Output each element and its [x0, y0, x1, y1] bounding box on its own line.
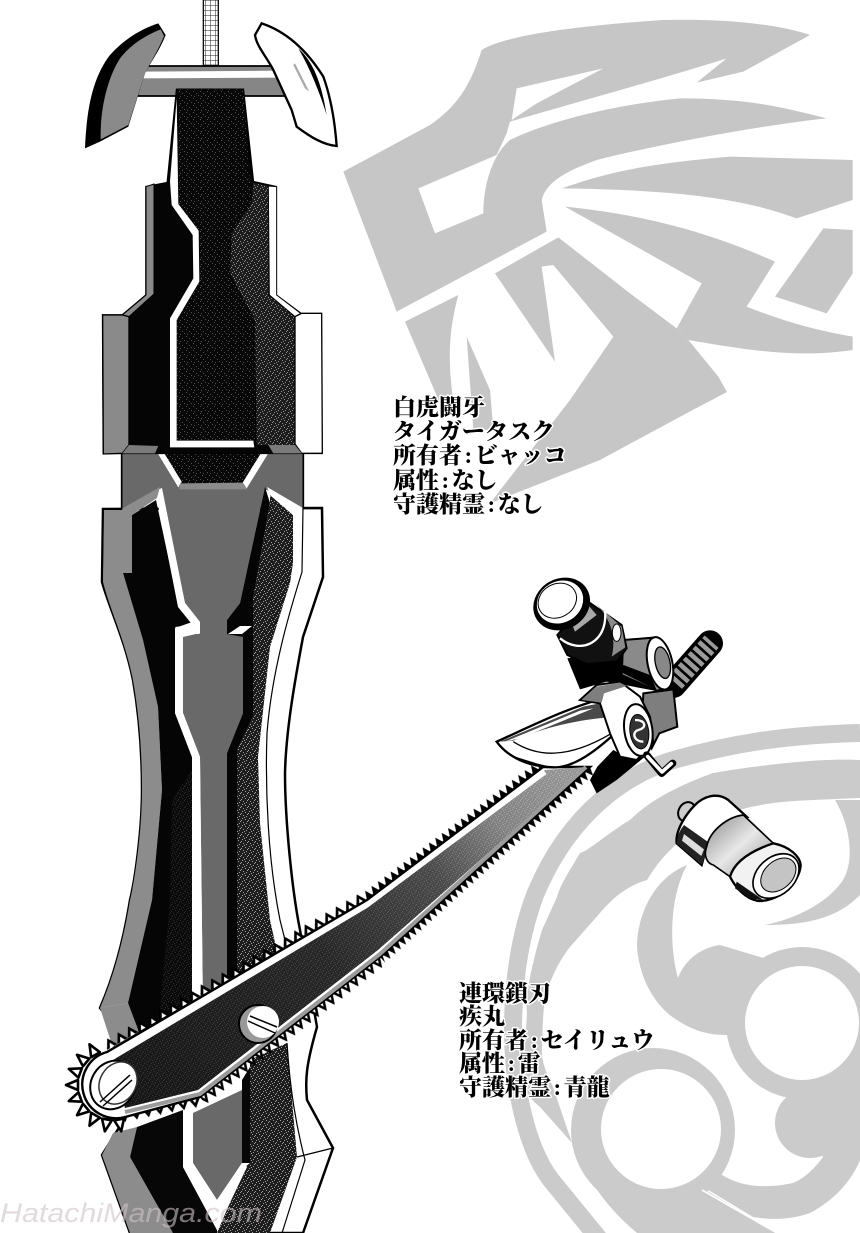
- outer ring of crest: [513, 733, 860, 1233]
- right horn: [255, 23, 337, 146]
- caption: chain blade: 属性:雷: [459, 1050, 541, 1076]
- left grey strips: [122, 184, 154, 317]
- small white notches: [175, 625, 252, 634]
- caption: chain blade: 疾丸: [459, 1004, 505, 1029]
- background emblem: triple comma crest: [513, 733, 860, 1233]
- middle screw: [239, 1005, 279, 1043]
- lower comma white centre: [601, 1069, 721, 1189]
- upper comma body: [637, 865, 770, 1035]
- capsule front: [730, 843, 801, 901]
- lower dark clamp: [590, 750, 645, 793]
- centre dark panel: [177, 89, 255, 442]
- sword: upper blade body: [103, 89, 322, 454]
- chainsaw blade bar: [66, 763, 593, 1132]
- capsule knob: [675, 799, 699, 824]
- centre grey panel: [157, 487, 265, 1010]
- thin inner line on white edge: [266, 508, 303, 1000]
- right stippled panel: [230, 183, 295, 445]
- tip saw teeth: [66, 1042, 126, 1132]
- inner crescent of crest: [523, 760, 860, 1143]
- left bevel arc: [123, 487, 160, 515]
- knob head: [524, 567, 600, 641]
- upper left white line: [157, 488, 200, 633]
- right comma white centre: [745, 966, 859, 1080]
- blade guard: [497, 698, 615, 767]
- upper silhouette: [103, 89, 322, 453]
- black housing: [567, 650, 660, 692]
- hanging chain: [203, 0, 218, 65]
- watermark: HatachiManga.com: [0, 1198, 262, 1228]
- knob stem: [557, 601, 627, 664]
- chainsaw mechanism: [497, 567, 808, 907]
- capsule back: [677, 796, 747, 865]
- caption: chain blade: 所有者:セイリュウ: [459, 1028, 654, 1053]
- crossbar: [135, 66, 285, 96]
- saw chain rim: [82, 767, 590, 1118]
- band lower extension: [122, 485, 303, 510]
- right white panel: [295, 313, 322, 453]
- bar texture: [113, 767, 586, 1108]
- separate capsule cartridge: [675, 796, 808, 907]
- band notch: [158, 448, 267, 487]
- caption: tiger tusk: 属性:なし: [393, 468, 498, 493]
- left horn: [85, 23, 166, 148]
- right comma ring: [726, 947, 860, 1099]
- sword: lower blade body: [100, 485, 333, 1233]
- centre white line: [175, 630, 203, 1010]
- caption: tiger tusk: 所有者:ビャッコ: [393, 443, 567, 468]
- right white arc: [267, 487, 303, 590]
- bar plate: [113, 767, 586, 1108]
- side cylinder: [620, 635, 678, 692]
- grey below left corner: [100, 1003, 142, 1048]
- centre white outline: [170, 98, 254, 447]
- tip screw: [81, 1052, 145, 1118]
- caption: chain blade: 守護精霊:青龍: [459, 1074, 610, 1100]
- bottom bevels: [122, 445, 302, 453]
- caption: tiger tusk: タイガータスク: [393, 419, 555, 444]
- right stippled panel: [237, 495, 293, 1010]
- capsule glass: [705, 815, 773, 877]
- right edge mass: [800, 1060, 860, 1160]
- white top stripe: [108, 772, 545, 1056]
- background emblem: tiger crest: [343, 20, 853, 503]
- stippled shading on left panel: [160, 770, 192, 1010]
- caption: tiger tusk: 守護精霊:なし: [393, 491, 544, 517]
- caption: tiger tusk: [393, 394, 567, 517]
- lower-left comma mass: [575, 1130, 777, 1233]
- band white bars: [156, 447, 269, 488]
- lower centre grey: [193, 1090, 242, 1200]
- right black stripes: [227, 487, 270, 1010]
- band trapezoid: [179, 483, 247, 489]
- lower comma ring: [571, 1048, 735, 1212]
- sword: central band: [122, 447, 303, 508]
- hub cap: [580, 682, 653, 760]
- left grey edge: [100, 510, 162, 1008]
- rear bracket: [642, 689, 677, 748]
- lower tip stipple: [217, 1043, 297, 1233]
- upper right crescent: [765, 800, 860, 925]
- left grey panel: [103, 315, 129, 454]
- lower tip black: [130, 1110, 217, 1233]
- caption: chain blade: 連環鎖刃: [459, 980, 551, 1006]
- right white strips: [268, 186, 301, 317]
- hub disc: [621, 702, 656, 758]
- hook lever: [647, 755, 673, 773]
- left black panel: [123, 500, 198, 1040]
- upper saw teeth: [104, 763, 593, 1118]
- caption: tiger tusk: 白虎闘牙: [393, 394, 485, 420]
- bar lower grey rim: [125, 767, 586, 1112]
- sword: chain and guard: [85, 0, 337, 148]
- lower black stripe: [242, 1067, 250, 1163]
- caption: chain blade: [459, 980, 654, 1100]
- threaded grip: [673, 642, 712, 685]
- thin white cut: [702, 1190, 777, 1233]
- blade silhouette: [100, 508, 333, 1233]
- lower right band: [700, 1100, 860, 1219]
- lower edge lines: [282, 1043, 333, 1233]
- lower tip grey: [102, 1127, 173, 1233]
- white V tip: [183, 1112, 247, 1230]
- lower bump: [775, 1088, 845, 1158]
